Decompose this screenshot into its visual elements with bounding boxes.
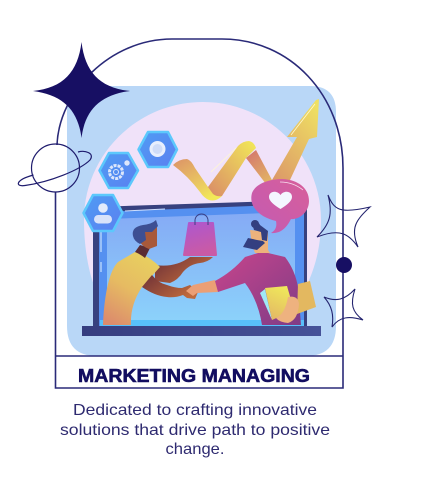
outline star upper	[317, 195, 370, 247]
man skin forearm	[186, 280, 218, 296]
speech bubble with heart	[251, 179, 309, 233]
laptop screen	[93, 200, 307, 327]
heart	[269, 192, 292, 209]
man head with beard	[250, 230, 270, 253]
frame dot	[336, 257, 352, 273]
shopping bag	[184, 214, 216, 255]
man back arm	[155, 257, 213, 283]
description	[60, 402, 330, 458]
four-point star dark	[33, 42, 130, 138]
laptop base	[82, 326, 321, 336]
man handshake arm	[142, 275, 198, 299]
man shirt	[215, 253, 301, 325]
title: MARKETING MANAGING	[78, 366, 310, 386]
description: change.	[166, 441, 224, 458]
folder with hand	[297, 281, 316, 314]
man head	[139, 226, 157, 249]
man in magenta shirt	[186, 220, 316, 325]
man in yellow shirt	[103, 220, 213, 325]
hexagon icon: person	[84, 195, 122, 231]
growth arrow	[173, 99, 319, 200]
description: solutions that drive path to positive	[60, 422, 330, 439]
planet icon	[18, 144, 91, 192]
laptop	[82, 200, 321, 336]
pink circle backdrop	[84, 102, 321, 326]
blue background panel	[67, 86, 336, 356]
hexagon icon: circle	[138, 132, 177, 167]
arch frame	[56, 39, 343, 388]
description: Dedicated to crafting innovative	[73, 402, 317, 419]
man torso	[103, 252, 160, 325]
hexagon icon: gear	[100, 153, 138, 188]
outline star lower	[324, 289, 363, 327]
